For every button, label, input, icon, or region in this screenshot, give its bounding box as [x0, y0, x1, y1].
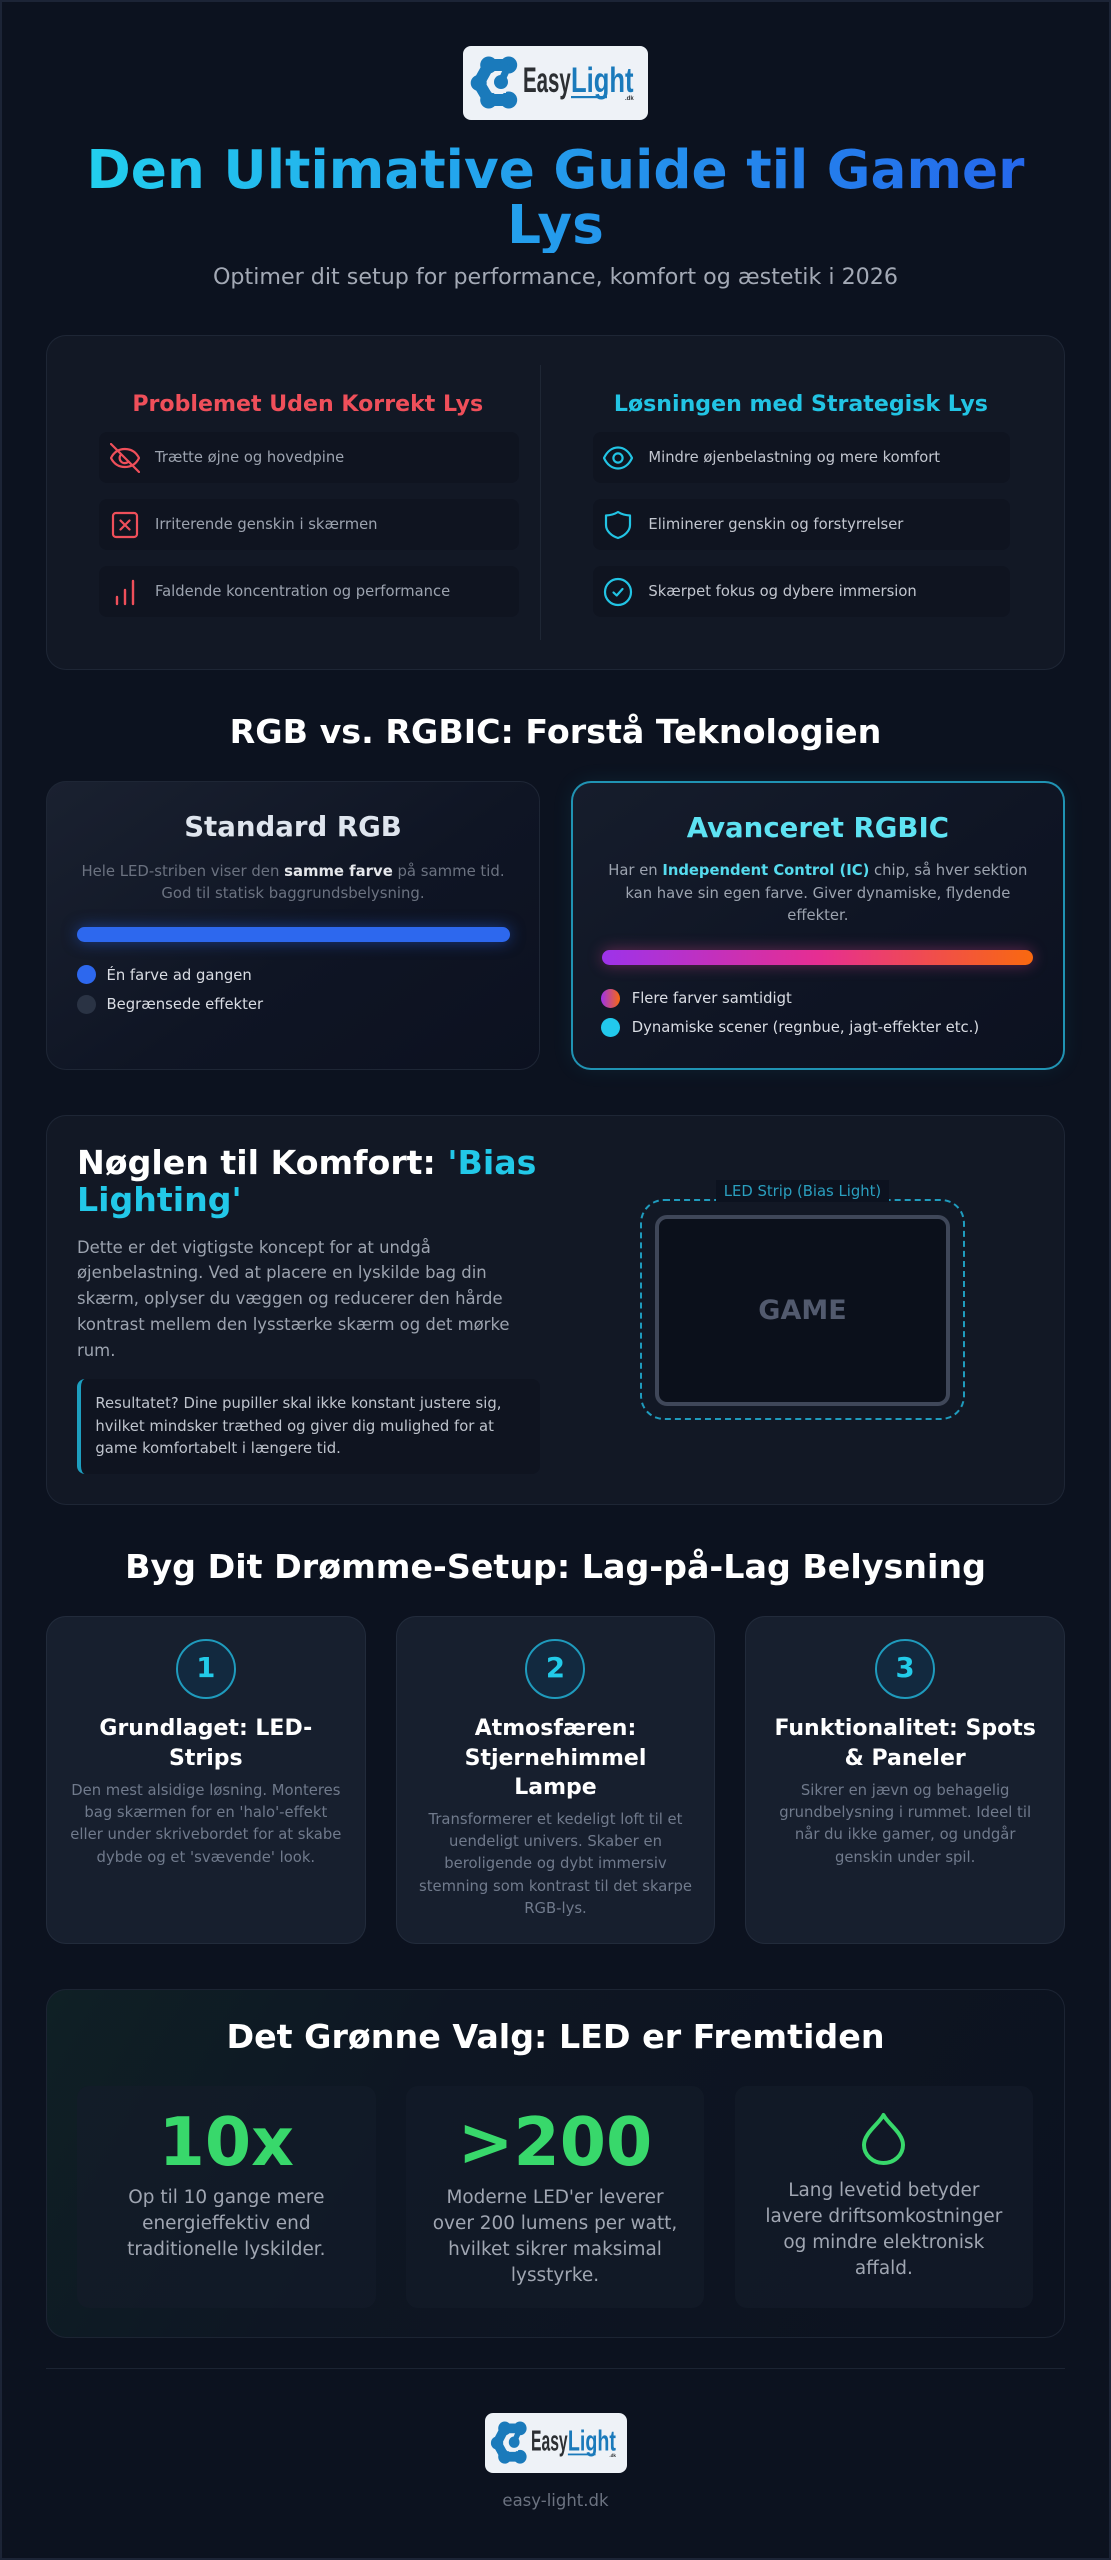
subtitle: Optimer dit setup for performance, komfort og æstetik i 2026	[213, 264, 898, 290]
stat: 200 lumens: lysstyrke.	[511, 2265, 599, 2286]
panel: step 2	[396, 1616, 715, 1944]
number badge: 2	[546, 1652, 565, 1684]
number badge: 1	[196, 1652, 215, 1684]
step text: når du ikke gamer, og undgår	[795, 1826, 1015, 1843]
stat: 200 lumens: hvilket sikrer maksimal	[448, 2239, 662, 2260]
stat: long lifetime: lavere driftsomkostninger	[765, 2206, 1002, 2227]
step heading: Atmosfæren:	[475, 1716, 636, 1741]
step heading: Grundlaget: LED-	[99, 1716, 312, 1741]
step text	[779, 1782, 1031, 1866]
item: less eye strain	[593, 432, 1010, 483]
number badge	[176, 1639, 236, 1699]
step text: uendeligt univers. Skaber en	[449, 1833, 662, 1850]
panel: step 3	[745, 1616, 1065, 1944]
item: sharper focus	[593, 566, 1010, 617]
callout: hvilket mindsker træthed og giver dig mulighed for at	[95, 1418, 494, 1435]
logo: EasyLight header	[463, 46, 648, 120]
heading: Det Grønne Valg: LED er Fremtiden	[226, 2017, 885, 2056]
number badge	[525, 1639, 585, 1699]
item: eliminates glare: Eliminerer genskin og forstyrrelser	[648, 516, 903, 533]
body text: rum.	[77, 1341, 115, 1360]
description	[81, 862, 505, 902]
heading: Lighting'	[77, 1180, 242, 1219]
step heading: Funktionalitet: Spots	[774, 1716, 1036, 1741]
callout	[77, 1379, 540, 1474]
stat: 10x: energieffektiv end	[142, 2213, 311, 2234]
logo: EasyLight footer	[485, 2413, 627, 2473]
panel: problem and solution	[46, 335, 1065, 670]
step text: grundbelysning i rummet. Ideel til	[779, 1804, 1031, 1821]
step heading: Strips	[169, 1746, 243, 1771]
item: glare	[99, 499, 518, 550]
panel: advanced RGBIC	[571, 781, 1065, 1070]
dot: cyan	[601, 1018, 620, 1036]
step text: bag skærmen for en 'halo'-effekt	[84, 1804, 327, 1821]
logo: EasyLight footer: .dk	[609, 2453, 616, 2459]
heading: RGB vs RGBIC: RGB vs. RGBIC: Forstå Teknologien	[230, 712, 881, 751]
label: LED strip: LED Strip (Bias Light)	[724, 1183, 881, 1200]
step heading	[774, 1716, 1036, 1771]
item: falling concentration	[99, 566, 518, 617]
step heading: & Paneler	[845, 1746, 966, 1771]
stat: 10x: 10x	[159, 2102, 294, 2180]
legend text: Dynamiske scener (regnbue, jagt-effekter etc.)	[632, 1019, 979, 1036]
stat: 10x	[77, 2086, 376, 2308]
legend text: Begrænsede effekter	[106, 996, 263, 1013]
stat: long lifetime: og mindre elektronisk	[783, 2232, 984, 2253]
stat: 10x: Op til 10 gange mere	[128, 2187, 324, 2208]
step heading	[465, 1716, 646, 1800]
stat: 200 lumens: Moderne LED'er leverer	[446, 2187, 664, 2208]
dot: grey	[76, 994, 96, 1014]
item: less eye strain: Mindre øjenbelastning og mere komfort	[648, 449, 940, 466]
step text: RGB-lys.	[524, 1900, 587, 1917]
description: God til statisk baggrundsbelysning.	[161, 884, 425, 902]
body text: kontrast mellem den lysstærke skærm og det mørke	[77, 1315, 510, 1334]
stat: long lifetime: Lang levetid betyder	[788, 2180, 979, 2201]
dot: blue	[76, 965, 96, 984]
item: tired eyes: Trætte øjne og hovedpine	[155, 449, 344, 466]
stat: 200 lumens	[406, 2086, 704, 2308]
heading: Avanceret RGBIC	[687, 811, 949, 844]
stat: 200 lumens: over 200 lumens per watt,	[433, 2213, 677, 2234]
logo: EasyLight footer: Easy	[531, 2425, 568, 2456]
description	[608, 862, 1027, 924]
step text: genskin under spil.	[835, 1849, 975, 1866]
bar: gradient strip	[602, 950, 1033, 965]
item: tired eyes	[99, 432, 518, 483]
diagram: monitor with bias light	[640, 1183, 965, 1420]
body text	[77, 1238, 510, 1360]
heading: Nøglen til Komfort: 'Bias	[77, 1143, 536, 1182]
body text: øjenbelastning. Ved at placere en lyskilde bag din	[77, 1263, 487, 1282]
legend text: Flere farver samtidigt	[632, 990, 792, 1007]
title: Den Ultimative Guide til Gamer	[87, 139, 1024, 201]
stat: long lifetime: affald.	[855, 2258, 913, 2279]
body text: Dette er det vigtigste koncept for at undgå	[77, 1238, 431, 1257]
bar: single colour strip	[76, 927, 510, 942]
panel: standard RGB	[46, 781, 540, 1070]
description: kan have sin egen farve. Giver dynamiske, flydende	[625, 885, 1010, 902]
panel: green choice	[46, 1989, 1065, 2338]
item: glare: Irriterende genskin i skærmen	[155, 516, 377, 533]
step text: stemning som kontrast til det skarpe	[419, 1878, 692, 1895]
heading: solution: Løsningen med Strategisk Lys	[614, 391, 988, 417]
heading: problem: Problemet Uden Korrekt Lys	[132, 391, 483, 417]
title	[46, 143, 1065, 253]
step text: Sikrer en jævn og behagelig	[801, 1782, 1009, 1799]
step text	[70, 1782, 341, 1866]
heading: layered lighting: Byg Dit Drømme-Setup: Lag-på-Lag Belysning	[125, 1547, 986, 1586]
item: falling concentration: Faldende koncentration og performance	[155, 583, 450, 600]
dot: gradient	[601, 988, 620, 1008]
step text: Transformerer et kedeligt loft til et	[428, 1811, 682, 1828]
item: eliminates glare	[593, 499, 1010, 550]
logo: EasyLight header: .dk	[625, 96, 634, 102]
number badge: 3	[896, 1652, 915, 1684]
stat: 200 lumens: >200	[458, 2102, 652, 2180]
number badge	[875, 1639, 935, 1699]
stat: 10x: traditionelle lyskilder.	[127, 2239, 326, 2260]
step heading: Stjernehimmel	[465, 1746, 646, 1771]
description: effekter.	[787, 907, 848, 924]
panel: step 1	[46, 1616, 366, 1944]
description: Hele LED-striben viser den samme farve på samme tid.	[81, 862, 505, 880]
title: Lys	[507, 194, 604, 256]
body text: skærm, oplyser du væggen og reducerer den hårde	[77, 1289, 503, 1308]
monitor	[655, 1215, 950, 1406]
callout: game komfortabelt i længere tid.	[95, 1440, 341, 1457]
heading	[77, 1143, 536, 1219]
logo: EasyLight header: Easy	[523, 61, 571, 100]
callout: Resultatet? Dine pupiller skal ikke konstant justere sig,	[95, 1395, 501, 1412]
heading: Standard RGB	[184, 810, 402, 843]
step text	[419, 1811, 692, 1917]
step text: Den mest alsidige løsning. Monteres	[71, 1782, 340, 1799]
monitor: GAME	[758, 1295, 847, 1326]
step text: beroligende og dybt immersiv	[444, 1855, 667, 1872]
footer url: easy-light.dk	[502, 2491, 609, 2510]
panel: bias lighting	[46, 1115, 1065, 1505]
step heading	[99, 1716, 312, 1771]
item: sharper focus: Skærpet fokus og dybere immersion	[648, 583, 917, 600]
description: Har en Independent Control (IC) chip, så hver sektion	[608, 862, 1027, 879]
step text: dybde og et 'svævende' look.	[97, 1849, 315, 1866]
stat: long lifetime	[734, 2086, 1033, 2308]
step heading: Lampe	[514, 1775, 597, 1800]
legend text: Én farve ad gangen	[106, 967, 252, 984]
step text: eller under skrivebordet for at skabe	[70, 1826, 341, 1843]
